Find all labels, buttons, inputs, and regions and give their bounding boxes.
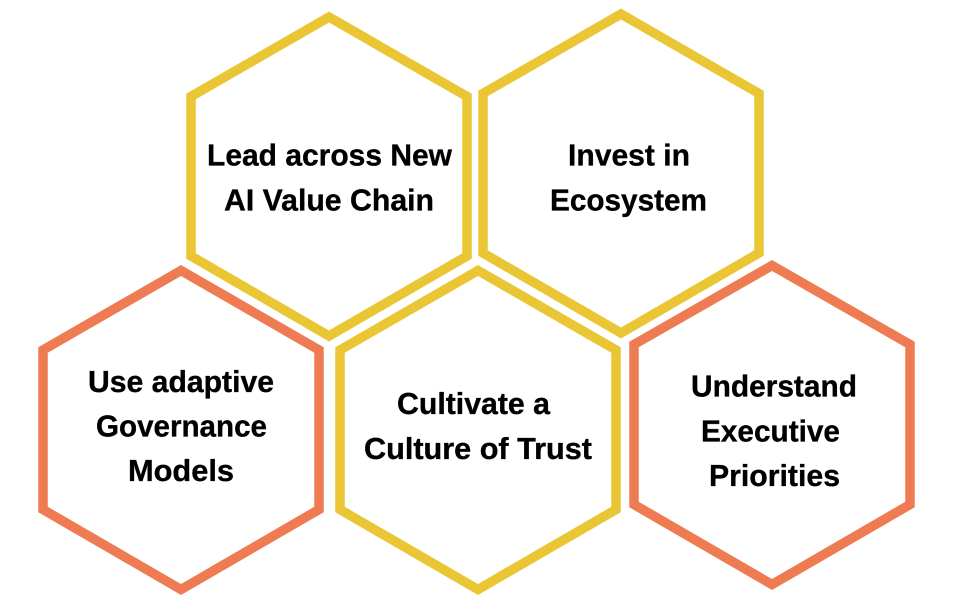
panel: Cultivate a Culture of Trust: Culture of Trust	[364, 431, 592, 466]
panel: Understand Executive Priorities	[634, 266, 910, 584]
panel: Cultivate a Culture of Trust	[340, 270, 616, 590]
panel: Lead across New AI Value Chain	[191, 17, 467, 336]
panel: Invest in Ecosystem: Invest in	[568, 138, 690, 172]
panel: Use adaptive Governance Models	[43, 270, 319, 590]
panel: Invest in Ecosystem	[483, 14, 759, 333]
panel: Use adaptive Governance Models: Governance	[96, 408, 267, 444]
panel: Use adaptive Governance Models: Use adaptive	[88, 364, 274, 399]
panel: Cultivate a Culture of Trust: Cultivate a	[397, 386, 551, 421]
panel: Invest in Ecosystem: Ecosystem	[550, 182, 707, 218]
panel: Use adaptive Governance Models: Models	[128, 453, 234, 488]
panel: Lead across New AI Value Chain: Lead across New	[207, 138, 453, 172]
panel: Understand Executive Priorities: Understand	[691, 368, 857, 404]
panel: Lead across New AI Value Chain: AI Value Chain	[224, 182, 434, 218]
panel: Understand Executive Priorities: Executive	[701, 414, 840, 448]
panel: Understand Executive Priorities: Priorities	[709, 458, 840, 493]
